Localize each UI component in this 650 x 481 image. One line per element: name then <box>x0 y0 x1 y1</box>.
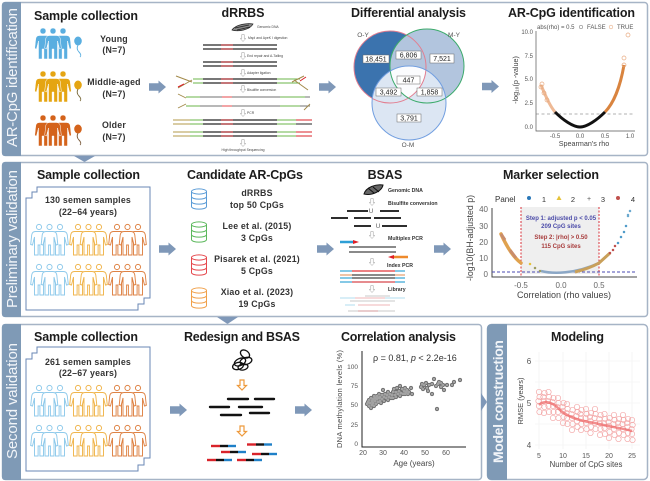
chart: RMSE line: 15 <box>582 453 590 460</box>
chart: correlation scatter: 30 <box>379 450 387 457</box>
chart: marker selection volcano: Step 2: |rho| > 0.50 <box>534 235 588 241</box>
database: Lee et al.: 3 CpGs <box>241 233 273 243</box>
chart: correlation scatter <box>335 350 466 468</box>
diagram: dRRBS workflow: Genomic DNA <box>257 25 279 29</box>
arrow <box>149 80 166 94</box>
heading: differential analysis: Differential analysis <box>351 6 466 20</box>
chart: RMSE line: 6 <box>527 357 532 366</box>
chart: venn diagram: M-Y <box>448 32 461 39</box>
diagram: BSAS workflow: Index PCR <box>387 263 413 269</box>
diagram: dRRBS workflow: Adapter ligation <box>247 71 271 75</box>
frame: 261 semen samples: (22–67 years) <box>59 368 117 378</box>
chart: marker selection volcano: -0.5 <box>514 281 528 290</box>
chart: marker selection volcano: 115 CpG sites <box>541 244 581 250</box>
database: Xiao et al.: 19 CpGs <box>238 299 276 309</box>
heading: redesign and BSAS: Redesign and BSAS <box>184 330 300 344</box>
chart: volcano plot: FALSE <box>587 25 606 31</box>
diagram: BSAS workflow: U <box>369 209 373 215</box>
chart: marker selection volcano: 0 <box>484 270 489 279</box>
sidebar label: model construction: Model construction <box>490 340 506 463</box>
chart: volcano plot: -log₁₀(p -value) <box>511 56 520 104</box>
chart: marker selection volcano: 0.0 <box>555 281 567 290</box>
chart: marker selection volcano: 10 <box>479 254 489 263</box>
chart: volcano plot: 10.0 <box>521 30 534 36</box>
heading: marker selection: Marker selection <box>503 168 599 182</box>
chart: volcano plot: 0.5 <box>601 134 610 140</box>
chart: marker selection volcano: 40 <box>479 205 489 214</box>
chart: venn diagram <box>354 29 464 149</box>
database: Pisarek et al. <box>192 254 300 276</box>
diagram: dRRBS workflow: MspI and ApeK I digestion <box>248 36 288 40</box>
heading: sample collection: Sample collection <box>34 9 138 23</box>
chart: volcano plot: Spearman's rho <box>559 139 609 148</box>
sidebar label: second validation: Second validation <box>4 343 21 459</box>
database: dRRBS: dRRBS <box>241 188 273 198</box>
arrow <box>482 80 499 93</box>
arrow <box>295 404 312 416</box>
chart: RMSE line: 20 <box>605 453 613 460</box>
chart: venn diagram: O-Y <box>357 32 369 39</box>
diagram: redesign workflow <box>207 348 277 460</box>
chart: correlation scatter: 25 <box>351 422 358 429</box>
heading: sample collection: Sample collection <box>34 330 138 344</box>
chart: correlation scatter: ρ = 0.81, p < 2.2e-16 <box>373 353 457 363</box>
sidebar label: preliminary validation: Preliminary validation <box>4 170 21 308</box>
database: dRRBS: top 50 CpGs <box>230 200 284 210</box>
sidebar label: AR-CpG identification: AR-CpG identification <box>4 8 21 147</box>
chart: volcano plot: 0.0 <box>525 125 534 131</box>
frame: 130 semen samples <box>26 187 150 310</box>
text: older <box>102 120 126 142</box>
diagram: dRRBS workflow: End repair and A-Tailing <box>247 54 283 58</box>
chart: correlation scatter: 60 <box>442 450 450 457</box>
chart: venn diagram: 1,858 <box>421 90 438 96</box>
chart: correlation scatter: 0 <box>354 441 358 448</box>
chart: venn diagram: 18,451 <box>365 56 387 64</box>
chart: correlation scatter: 100 <box>347 364 358 371</box>
panel: AR-CpG identification <box>2 2 648 156</box>
chart: marker selection volcano: 20 <box>479 238 489 247</box>
chart: marker selection volcano: Panel <box>495 195 516 204</box>
connector triangle <box>74 156 95 162</box>
arrow: triangle to modeling <box>481 393 487 411</box>
frame: 130 semen samples: 130 semen samples <box>45 195 131 205</box>
chart: volcano plot <box>511 25 635 148</box>
diagram: dRRBS workflow <box>173 24 312 152</box>
chart: volcano plot: 7.5 <box>525 54 534 60</box>
diagram: dRRBS workflow: Bisulfite conversion <box>247 88 276 92</box>
chart: volcano plot: 5.0 <box>525 77 534 83</box>
chart: marker selection volcano: 2 <box>571 195 575 204</box>
heading: AR-CpG identification: AR-CpG identification <box>508 6 635 20</box>
text: young <box>100 34 128 55</box>
database: Lee et al.: Lee et al. (2015) <box>223 221 291 231</box>
database: dRRBS <box>192 188 284 210</box>
heading: dRRBS: dRRBS <box>221 6 265 20</box>
chart: correlation scatter: DNA methylation levels (%) <box>335 350 344 448</box>
chart: venn diagram: 7,521 <box>433 56 451 63</box>
chart: RMSE line: Number of CpG sites <box>550 460 622 469</box>
chart: marker selection volcano: 30 <box>479 222 489 231</box>
heading: correlation analysis: Correlation analysis <box>341 330 456 344</box>
heading: modeling: Modeling <box>551 330 604 344</box>
text: middle-aged: (N=7) <box>102 89 126 99</box>
diagram: BSAS workflow: Bisulfite conversion <box>388 201 438 207</box>
chart: volcano plot: abs(rho) = 0.5 <box>537 25 575 31</box>
text: middle-aged <box>87 77 141 99</box>
connector triangle <box>217 317 238 324</box>
text: young: (N=7) <box>102 45 126 55</box>
text: older: (N=7) <box>102 132 126 142</box>
chart: marker selection volcano: Step 1: adjusted p < 0.05 <box>526 216 597 222</box>
diagram: dRRBS workflow: PCR <box>247 111 255 115</box>
panel: second validation <box>2 324 482 480</box>
chart: RMSE line <box>516 352 640 469</box>
chart: marker selection volcano <box>465 195 637 300</box>
chart: correlation scatter: Age (years) <box>393 459 435 468</box>
chart: venn diagram: O-M <box>402 142 414 149</box>
chart: RMSE line: 25 <box>628 453 636 460</box>
arrow <box>434 242 451 256</box>
chart: correlation scatter: 50 <box>421 450 429 457</box>
icon: middle-aged group <box>35 71 82 102</box>
diagram: BSAS workflow: Multiplex PCR <box>388 236 423 242</box>
heading: sample collection: Sample collection <box>37 168 140 182</box>
frame: 130 semen samples: (22–64 years) <box>59 207 117 217</box>
chart: RMSE line: RMSE (years) <box>516 377 525 425</box>
chart: marker selection volcano: 209 CpG sites <box>541 224 582 230</box>
chart: volcano plot: 2.5 <box>525 101 534 107</box>
panel: preliminary validation <box>2 162 648 317</box>
chart: volcano plot: TRUE <box>617 25 633 31</box>
chart: volcano plot: -0.5 <box>550 134 561 140</box>
arrow <box>170 404 187 416</box>
database: Xiao et al.: Xiao et al. (2023) <box>221 287 293 297</box>
chart: RMSE line: 10 <box>559 453 567 460</box>
chart: correlation scatter: 20 <box>359 450 367 457</box>
chart: RMSE line: 5 <box>537 453 541 460</box>
diagram: BSAS workflow: U <box>376 224 380 230</box>
frame: 261 semen samples: 261 semen samples <box>45 357 131 367</box>
diagram: dRRBS workflow: High throughput Sequencing <box>222 148 265 152</box>
arrow <box>159 242 176 256</box>
database: Xiao et al. <box>192 287 293 309</box>
chart: marker selection volcano: 3 <box>601 195 605 204</box>
chart: volcano plot: 0.0 <box>576 134 585 140</box>
frame: 261 semen samples <box>26 347 150 471</box>
chart: marker selection volcano: 0.5 <box>593 281 605 290</box>
database: Pisarek et al.: Pisarek et al. (2021) <box>214 254 300 264</box>
diagram: BSAS workflow: Library <box>388 287 406 293</box>
text: older: Older <box>102 120 126 130</box>
chart: marker selection volcano: Correlation (rho values) <box>517 290 611 300</box>
panel: model construction <box>487 324 648 480</box>
chart: volcano plot: 1.0 <box>626 134 635 140</box>
diagram: BSAS workflow: Genomic DNA <box>388 188 423 194</box>
chart: venn diagram: 3,492 <box>380 90 397 96</box>
chart: correlation scatter: 50 <box>351 402 358 409</box>
chart: correlation scatter: 40 <box>400 450 408 457</box>
chart: venn diagram: 3,791 <box>400 116 418 122</box>
heading: candidate AR-CpGs: Candidate AR-CpGs <box>187 168 303 182</box>
arrow <box>319 80 336 94</box>
database: Pisarek et al.: 5 CpGs <box>241 266 273 276</box>
arrow <box>317 242 334 256</box>
chart: marker selection volcano: -log10(BH-adjusted p) <box>465 195 475 281</box>
database: Lee et al. <box>192 221 291 243</box>
chart: marker selection volcano: 4 <box>631 195 635 204</box>
text: young: Young <box>100 34 128 44</box>
chart: venn diagram: 447 <box>403 78 414 84</box>
chart: RMSE line: 4 <box>527 441 532 450</box>
chart: venn diagram: 6,806 <box>400 52 417 60</box>
chart: marker selection volcano: + <box>587 196 591 203</box>
icon: young group <box>35 28 82 59</box>
chart: marker selection volcano: 1 <box>542 195 546 204</box>
chart: RMSE line: 5 <box>527 399 532 408</box>
chart: correlation scatter: 75 <box>351 383 358 390</box>
diagram: BSAS workflow <box>331 185 438 311</box>
icon: older group <box>35 115 82 146</box>
heading: BSAS: BSAS <box>368 168 402 182</box>
text: middle-aged: Middle-aged <box>87 77 141 87</box>
